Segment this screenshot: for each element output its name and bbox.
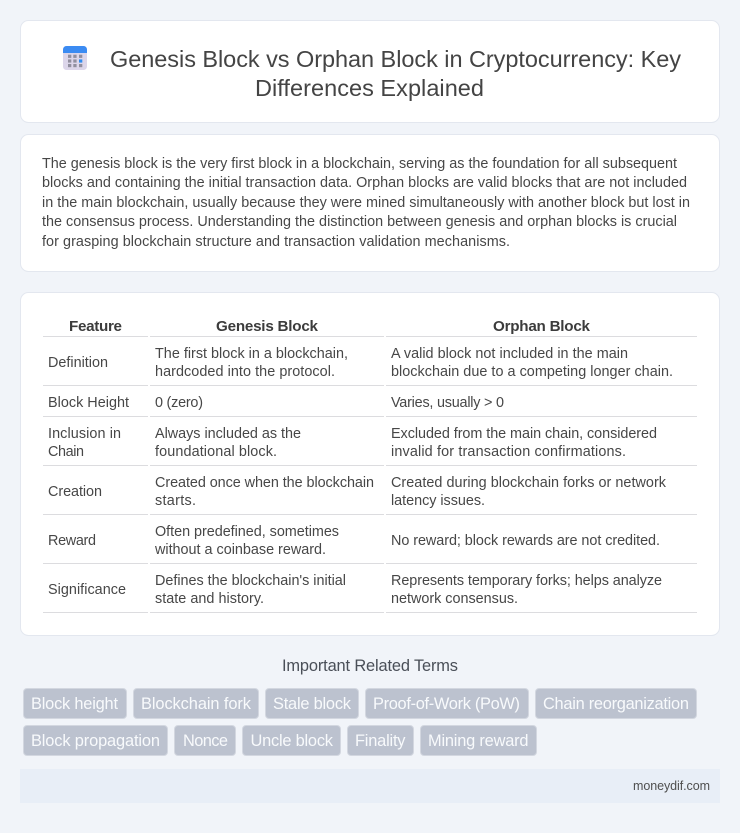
table row: significance: Represents temporary forks; helps analyze: [391, 573, 662, 589]
tag: stale block: Stale block: [273, 695, 352, 713]
panel: introduction: [20, 134, 720, 272]
table row: creation: Created once when the blockchain: [155, 475, 374, 491]
tag: proof-of-work: Proof-of-Work (PoW): [373, 695, 520, 713]
tag: mining reward: Mining reward: [428, 732, 528, 750]
table row: definition: The first block in a blockchain,: [155, 346, 348, 362]
footer: [20, 769, 720, 803]
table row: creation: latency issues.: [391, 493, 485, 509]
table row: block height: 0 (zero): [155, 395, 203, 411]
tags: related terms: [24, 688, 696, 756]
tag: uncle block: Uncle block: [250, 732, 334, 750]
tag: block height: Block height: [31, 695, 118, 713]
tag: finality: Finality: [355, 732, 406, 750]
table row: inclusion in chain: foundational block.: [155, 444, 277, 460]
tag: finality: [348, 726, 414, 756]
panel: title header: [20, 20, 720, 122]
table row: inclusion in chain: [43, 426, 697, 466]
tag: block propagation: [24, 726, 168, 756]
tag: chain reorganization: Chain reorganization: [543, 695, 689, 713]
table header: Orphan Block: [493, 318, 591, 335]
text block: introduction paragraph: in the main blockchain, usually because they were mined simultaneously with another block but lost in: [42, 195, 690, 211]
table row: creation: Creation: [48, 484, 102, 500]
table row: definition: [43, 346, 697, 386]
table row: definition: A valid block not included in the main: [391, 346, 628, 362]
table row: reward: without a coinbase reward.: [154, 542, 326, 558]
table row: inclusion in chain: Chain: [48, 444, 84, 460]
tag: uncle block: [242, 726, 340, 756]
table row: definition: hardcoded into the protocol.: [155, 364, 335, 380]
table row: reward: No reward; block rewards are not credited.: [391, 533, 660, 549]
tag: stale block: [266, 688, 358, 718]
title: Genesis Block vs Orphan Block in Cryptocurrency: Key: [110, 46, 681, 72]
table row: significance: Significance: [48, 582, 126, 598]
table row: reward: [43, 524, 697, 564]
table row: reward: Reward: [48, 533, 96, 549]
table row: significance: [43, 573, 697, 613]
table row: definition: blockchain due to a competing longer chain.: [391, 364, 673, 380]
title: [110, 46, 681, 101]
table row: definition: Definition: [48, 355, 108, 371]
table row: creation: starts.: [155, 493, 196, 509]
tag: block height: [24, 688, 126, 718]
text block: introduction paragraph: for grasping blockchain structure and transaction validation mechanisms.: [42, 234, 510, 250]
text block: introduction paragraph: The genesis block is the very first block in a blockchain, serving as the foundation for all subsequent: [42, 156, 677, 172]
text block: introduction paragraph: blocks and containing the initial transaction data. Orphan blocks are valid blocks that are not included: [42, 175, 687, 191]
table header: [43, 318, 697, 337]
footer: moneydif.com: [633, 779, 710, 793]
table header: Feature: [69, 318, 122, 335]
icon: calendar: [63, 46, 87, 70]
table row: block height: Block Height: [48, 395, 129, 411]
tag: mining reward: [420, 726, 536, 756]
table row: inclusion in chain: Always included as the: [155, 426, 301, 442]
text block: introduction paragraph: the consensus process. Understanding the distinction between genesis and orphan blocks is crucial: [42, 214, 677, 230]
table row: block height: Varies, usually > 0: [391, 395, 504, 411]
table row: significance: Defines the blockchain's initial: [155, 573, 346, 589]
panel: comparison table: [20, 292, 720, 636]
table row: reward: Often predefined, sometimes: [155, 524, 339, 540]
table row: inclusion in chain: Excluded from the main chain, considered: [391, 426, 657, 442]
tag: proof-of-work: [366, 688, 528, 718]
tag: chain reorganization: [536, 688, 696, 718]
heading: important related terms: Important Related Terms: [282, 657, 458, 675]
table header: Genesis Block: [216, 318, 319, 335]
table row: creation: Created during blockchain forks or network: [391, 475, 667, 491]
table row: creation: [43, 475, 697, 515]
tag: nonce: [174, 726, 236, 756]
table row: significance: network consensus.: [391, 591, 518, 607]
table row: inclusion in chain: invalid for transaction confirmations.: [391, 444, 626, 460]
title: Differences Explained: [255, 75, 484, 101]
tag: blockchain fork: [134, 688, 258, 718]
tag: block propagation: Block propagation: [31, 732, 160, 750]
table row: significance: state and history.: [155, 591, 264, 607]
tag: blockchain fork: Blockchain fork: [141, 695, 252, 713]
table row: block height: [43, 395, 697, 417]
table row: inclusion in chain: Inclusion in: [48, 426, 121, 442]
text block: introduction paragraph: [42, 156, 690, 250]
tag: nonce: Nonce: [183, 732, 228, 750]
